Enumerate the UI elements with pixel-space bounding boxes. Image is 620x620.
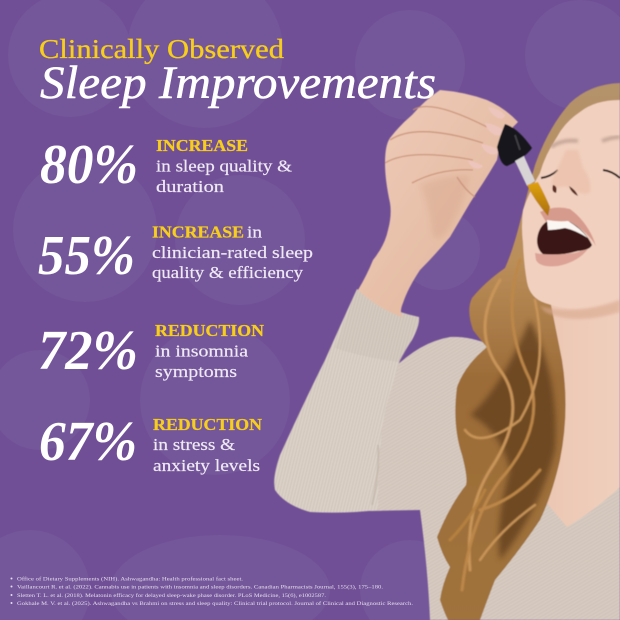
eyes <box>541 170 620 178</box>
stat: 72%: REDUCTION <box>155 321 265 340</box>
references: Sletten T. L. et al. (2018). Melatonin efficacy for delayed sleep-wake phase disorder. PLoS Medicine, 15(6), e1002587. <box>17 592 327 599</box>
stat: 55%: clinician-rated sleep <box>152 243 313 262</box>
stat: 72% <box>38 320 265 382</box>
stat: 67%: in stress & <box>153 435 235 454</box>
hair strands <box>450 260 540 590</box>
face <box>522 100 620 319</box>
stat: 72%: symptoms <box>155 362 237 381</box>
stat: 55%: in <box>247 222 263 242</box>
hair <box>437 83 620 620</box>
stat: 80%: in sleep quality & <box>156 156 292 176</box>
stat: 80%: INCREASE <box>156 136 248 155</box>
hand and forearm <box>358 90 518 318</box>
dropper <box>497 124 550 216</box>
title line 2: Sleep Improvements <box>40 57 436 109</box>
nose <box>552 150 590 194</box>
references: Vaillancourt R. et al. (2022). Cannabis use in patients with insomnia and sleep disorders. Canadian Pharmacists Journal, 155(3), 175–180. <box>17 584 384 590</box>
neck <box>520 280 620 530</box>
stat: 80%: 80% <box>40 134 138 196</box>
stat: 72%: 72% <box>38 320 138 382</box>
glass tube <box>515 156 535 186</box>
under-chin shadow <box>540 300 620 319</box>
sweater body <box>370 337 620 620</box>
dropper cap <box>497 124 532 166</box>
stat: 55% <box>38 222 313 287</box>
references: Office of Dietary Supplements (NIH). Ashwagandha: Health professional fact sheet. <box>17 576 244 582</box>
dark hair underside <box>470 320 556 560</box>
cuff ribbing <box>335 289 419 362</box>
stat: 80% <box>40 134 292 196</box>
sleeve <box>274 289 419 513</box>
oil <box>527 182 550 216</box>
stat: 80%: duration <box>156 177 225 196</box>
stat: 67% <box>39 411 263 475</box>
photo: woman taking dropper <box>274 83 620 620</box>
title line 1: Clinically Observed <box>39 34 285 64</box>
finger creases <box>385 106 487 197</box>
stat: 67%: 67% <box>39 411 137 473</box>
stat: 55%: quality & efficiency <box>152 263 304 282</box>
nostrils <box>552 185 578 196</box>
palm shadow <box>420 175 470 239</box>
eyebrows <box>551 137 620 147</box>
stat: 67%: anxiety levels <box>153 456 260 475</box>
stat: 67%: REDUCTION <box>153 415 263 434</box>
fingernails <box>468 107 505 169</box>
title <box>39 34 436 109</box>
references <box>10 576 414 607</box>
mouth <box>535 208 596 266</box>
stat: 55%: INCREASE <box>152 222 244 242</box>
stat: 55%: 55% <box>38 225 135 287</box>
references: Gokhale M. V. et al. (2025). Ashwagandha vs Brahmi on stress and sleep quality: Clinical trial protocol. Journal of Clinical and Diagnostic Research. <box>17 600 414 607</box>
stat: 72%: in insomnia <box>155 342 249 360</box>
